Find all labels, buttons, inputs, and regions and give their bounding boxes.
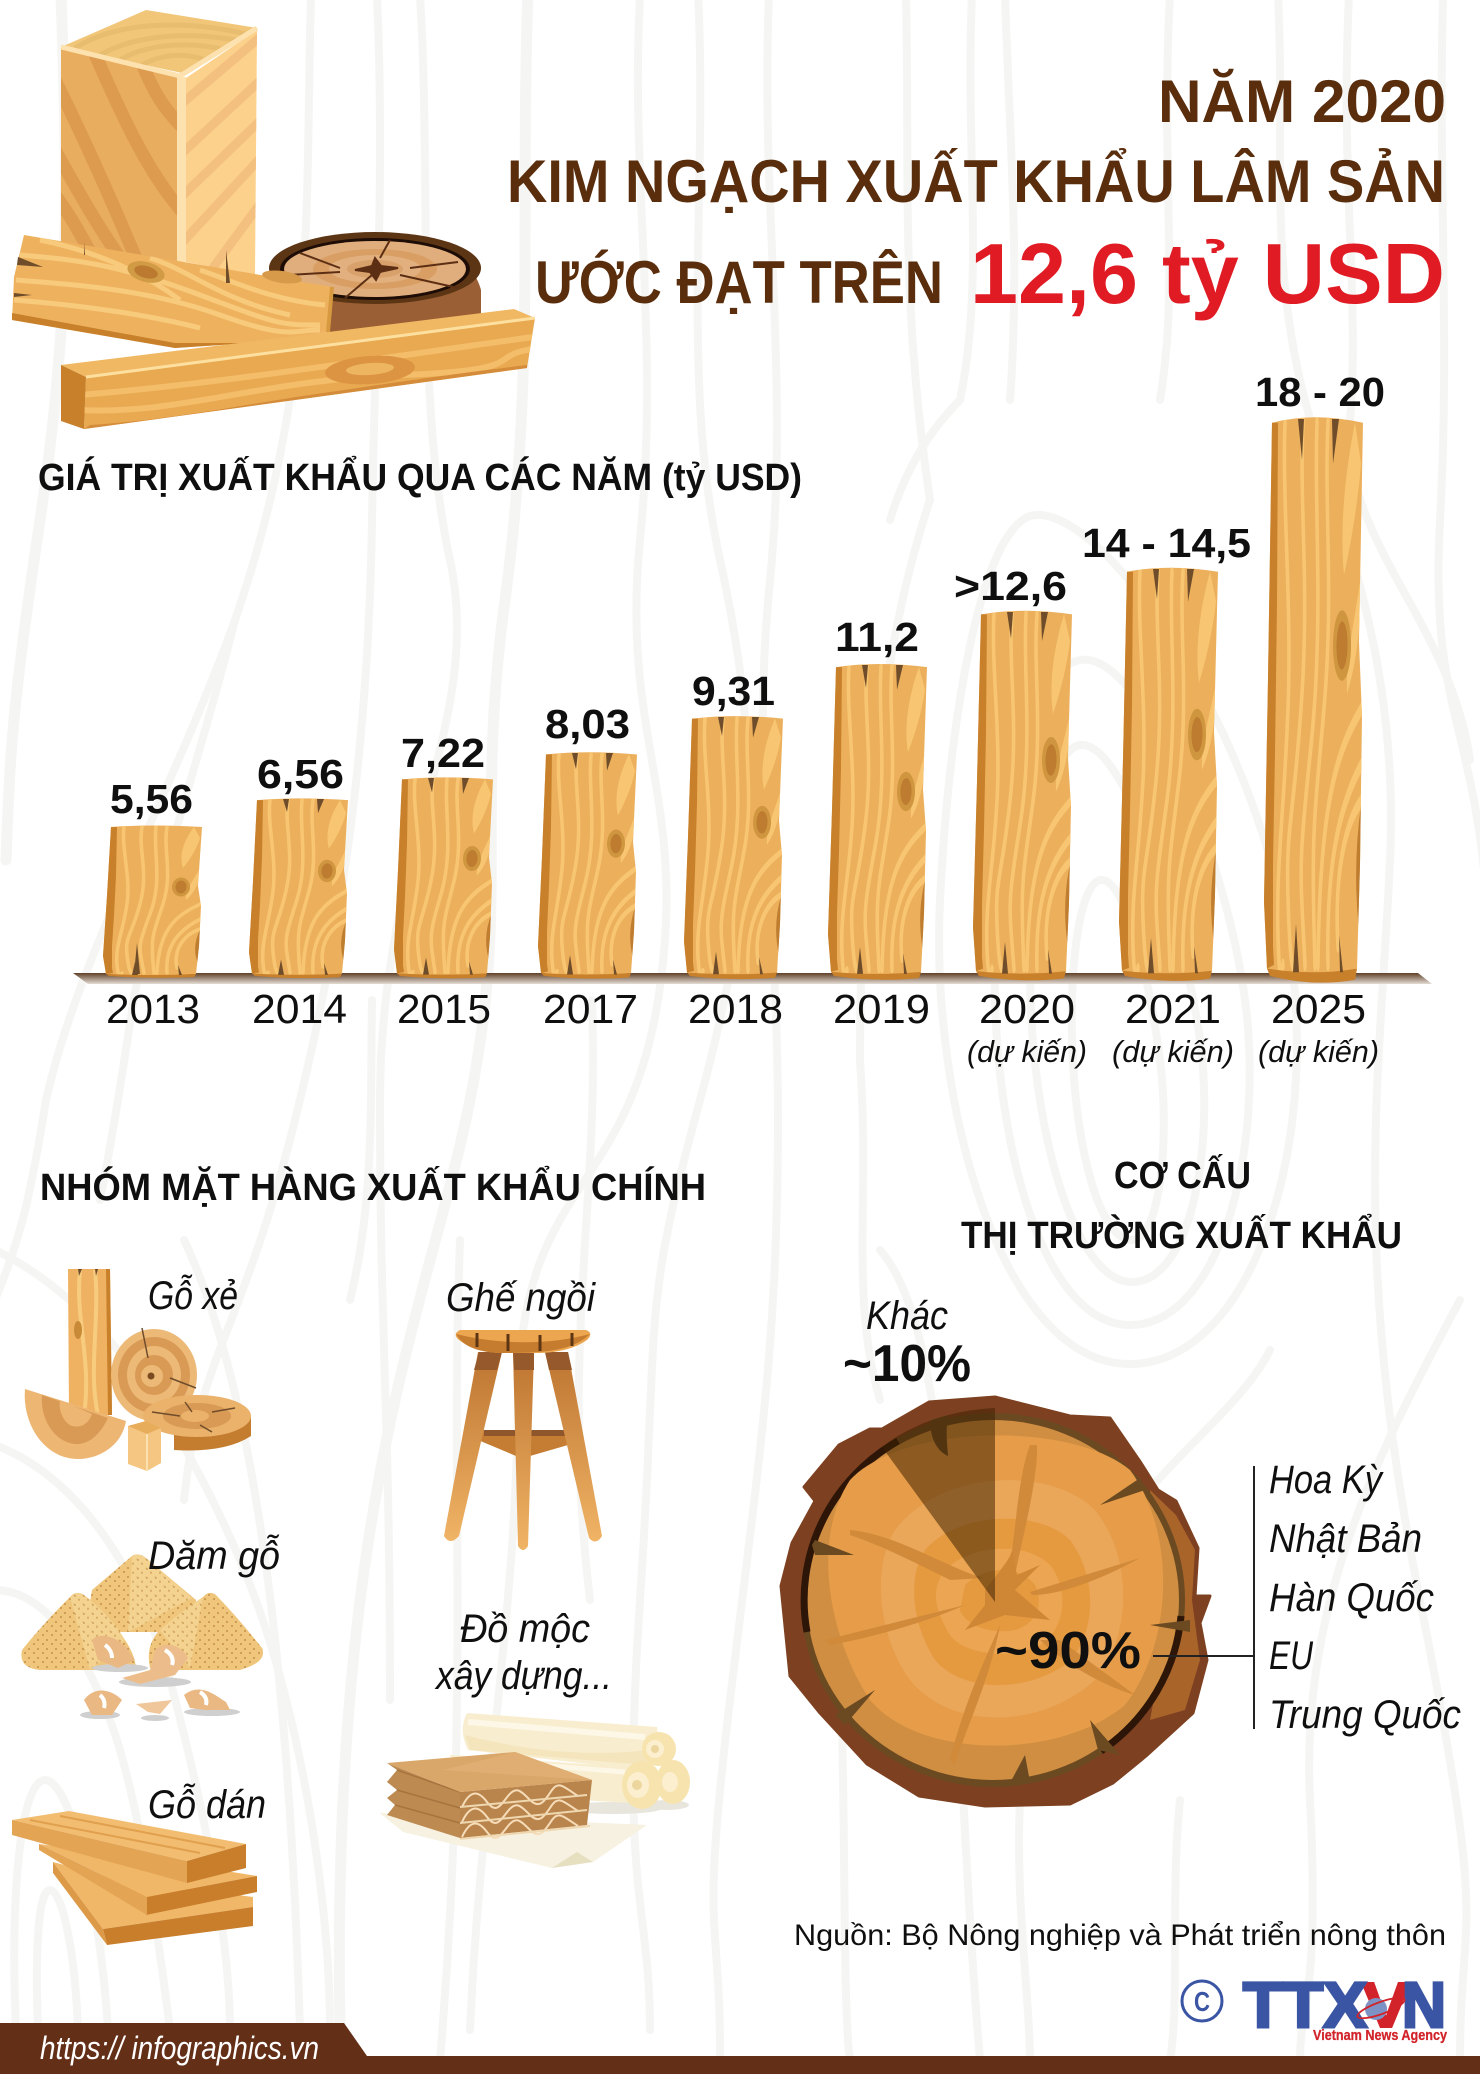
title line 1: NĂM 2020 [1158,68,1446,135]
headline value: 12,6 tỷ USD [970,227,1445,322]
market: Trung Quốc: Trung Quốc [1269,1693,1461,1737]
label: Đồ mộc: Đồ mộc [460,1607,590,1651]
value 2017: 8,03 [545,701,630,747]
column 2021 [1082,520,1251,1069]
year 2014: 2014 [252,986,347,1032]
globe [1355,1994,1407,2022]
icon: plywood planks [12,1811,257,1945]
value 2015: 7,22 [401,730,485,776]
value 2013: 5,56 [110,776,193,822]
title [507,68,1446,322]
icon: sawn timber [25,1269,251,1471]
icon: paper rolls and cardboard [380,1713,690,1868]
year 2018: 2018 [688,986,783,1032]
column 2018 [684,668,786,1032]
column 2015 [394,730,496,1032]
value 2018: 9,31 [692,668,775,714]
product: stool [444,1276,602,1550]
label: Gỗ dán: Gỗ dán [148,1782,266,1827]
label: Dăm gỗ: Dăm gỗ [148,1533,280,1578]
year 2019: 2019 [833,986,930,1032]
value 2021: 14 - 14,5 [1082,520,1251,566]
chart heading: GIÁ TRỊ XUẤT KHẨU QUA CÁC NĂM (tỷ USD) [38,454,802,499]
wood illustration: post, planks and log [12,10,540,429]
10% sector [882,1408,995,1602]
market list [1269,1458,1461,1737]
icon: stool [444,1330,602,1550]
connector bracket [1153,1466,1254,1729]
year 2015: 2015 [397,986,491,1032]
forecast note 2021: (dự kiến) [1112,1034,1234,1069]
products heading: NHÓM MẶT HÀNG XUẤT KHẨU CHÍNH [40,1164,706,1209]
product: wood products [380,1607,690,1868]
year 2017: 2017 [543,986,638,1032]
market: Hàn Quốc: Hàn Quốc [1269,1576,1434,1620]
market heading [961,1153,1402,1257]
heading line 1: CƠ CẤU [1114,1153,1251,1197]
label: Ghế ngồi: Ghế ngồi [446,1276,596,1320]
footer url: https:// infographics.vn [40,2030,319,2066]
forecast note 2020: (dự kiến) [967,1034,1087,1069]
agency letters: TTX [1243,1969,1367,2041]
value: 10%: ~10% [843,1335,971,1393]
chart shelf [73,973,1432,984]
logo: TTXVN [1182,1969,1448,2044]
wood bar 2015 [394,777,496,978]
label: xây dựng: xây dựng... [434,1654,612,1698]
market: Hoa Kỳ: Hoa Kỳ [1269,1458,1385,1502]
value 2020: >12,6 [954,563,1067,609]
year 2021: 2021 [1125,986,1221,1032]
heading line 2: THỊ TRƯỜNG XUẤT KHẨU [961,1212,1402,1257]
year 2020: 2020 [979,986,1075,1032]
agency name: Vietnam News Agency [1313,2027,1448,2044]
label: Khác: Khác [866,1294,948,1338]
bar chart: export value by year [73,369,1432,1069]
copyright mark: C [1194,1986,1210,2017]
footer bar [0,2023,1480,2074]
wood bar 2013 [103,826,205,978]
wood bar 2025 [1264,417,1366,983]
value 2014: 6,56 [257,751,344,797]
agency letter V: V [1362,1969,1410,2041]
icon: wood chip piles [21,1554,263,1721]
source: Nguồn: Bộ Nông nghiệp và Phát triển nông thôn [794,1919,1446,1952]
column 2014 [249,751,351,1032]
copyright mark [1182,1981,1222,2021]
wood bar 2021 [1119,568,1221,981]
column 2019 [828,614,930,1032]
label: Gỗ xẻ: Gỗ xẻ [148,1273,238,1318]
wood bar 2019 [828,664,930,980]
product: plywood [12,1782,266,1945]
product: wood chips [21,1533,280,1721]
forecast note 2025: (dự kiến) [1258,1034,1379,1069]
column 2013 [103,776,205,1032]
title line 3: ƯỚC ĐẠT TRÊN [535,249,943,316]
pie chart on log: market structure [781,1294,1461,1806]
year 2013: 2013 [106,986,200,1032]
log cross-section [781,1397,1210,1806]
value: 90%: ~90% [995,1622,1141,1680]
column 2020 [954,563,1087,1069]
wood bar 2014 [249,798,351,978]
agency letter N: N [1402,1969,1446,2041]
value 2025: 18 - 20 [1255,369,1385,415]
market: Nhật Bản: Nhật Bản [1269,1517,1422,1561]
column 2025 [1255,369,1385,1069]
value 2019: 11,2 [835,614,919,660]
product: sawn timber [25,1269,251,1471]
year 2025: 2025 [1271,986,1366,1032]
column 2017 [538,701,640,1032]
wood bar 2018 [684,716,786,979]
wood bar 2020 [973,611,1075,980]
wood bar 2017 [538,752,640,979]
market: EU: EU [1269,1634,1314,1678]
